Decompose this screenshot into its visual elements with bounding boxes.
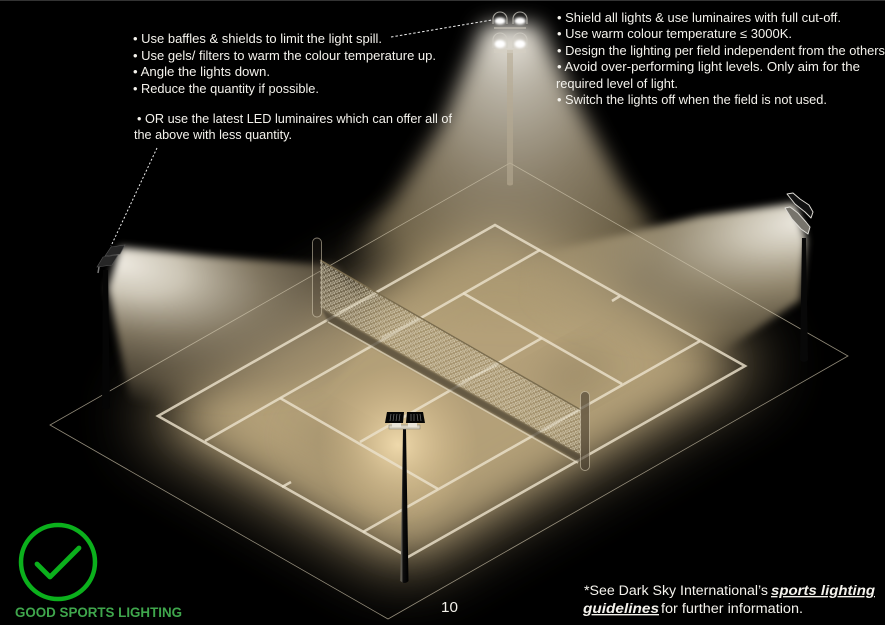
left net post (312, 238, 322, 317)
text block: general recommendations: • Shield all lights & use luminaires with full cut-off. (557, 11, 841, 25)
label: good sports lighting: GOOD SPORTS LIGHTING (15, 605, 182, 620)
footnote: sports lighting (771, 583, 876, 598)
footnote: *See Dark Sky International’s (584, 583, 768, 598)
light beam: right mast (520, 203, 806, 380)
text block: floodlight recommendations: • OR use the latest LED luminaires which can offer all of (137, 112, 453, 126)
tennis net (320, 260, 581, 455)
dotted leader: top mast (391, 20, 492, 37)
left mast with floodlights (97, 245, 125, 410)
text block: general recommendations: • Use warm colour temperature ≤ 3000K. (557, 27, 792, 41)
text block: general recommendations: • Avoid over-performing light levels. Only aim for the (557, 60, 860, 74)
light beam: top mast (330, 24, 668, 325)
top mast with four floodlights (493, 12, 527, 186)
light beam: left mast (108, 247, 380, 420)
right mast with floodlights (785, 193, 813, 362)
front mast with solar panels (385, 412, 425, 583)
ground light pool (135, 212, 768, 571)
field boundary (50, 163, 848, 619)
text block: general recommendations: • Switch the lights off when the field is not used. (557, 93, 827, 107)
text block: floodlight recommendations: • Reduce the quantity if possible. (133, 82, 319, 96)
net shadow (322, 309, 581, 463)
text block: floodlight recommendations (133, 32, 453, 142)
text block: floodlight recommendations: • Use gels/ filters to warm the colour temperature up. (133, 49, 436, 63)
text block: floodlight recommendations: • Use baffles & shields to limit the light spill. (133, 32, 382, 46)
right net post (580, 392, 590, 470)
tennis court lines (158, 225, 745, 557)
page number: 10 (441, 600, 458, 616)
text block: general recommendations: required level of light. (556, 77, 678, 91)
dotted leader: left mast (111, 148, 157, 246)
footnote: guidelines (582, 601, 660, 616)
text block: general recommendations: • Design the lighting per field independent from the others (557, 44, 885, 58)
footnote (582, 583, 876, 616)
text block: general recommendations (556, 11, 885, 107)
text block: floodlight recommendations: the above with less quantity. (134, 128, 292, 142)
footnote: for further information. (661, 601, 803, 616)
icon: green check mark (21, 525, 95, 599)
text block: floodlight recommendations: • Angle the lights down. (133, 65, 270, 79)
